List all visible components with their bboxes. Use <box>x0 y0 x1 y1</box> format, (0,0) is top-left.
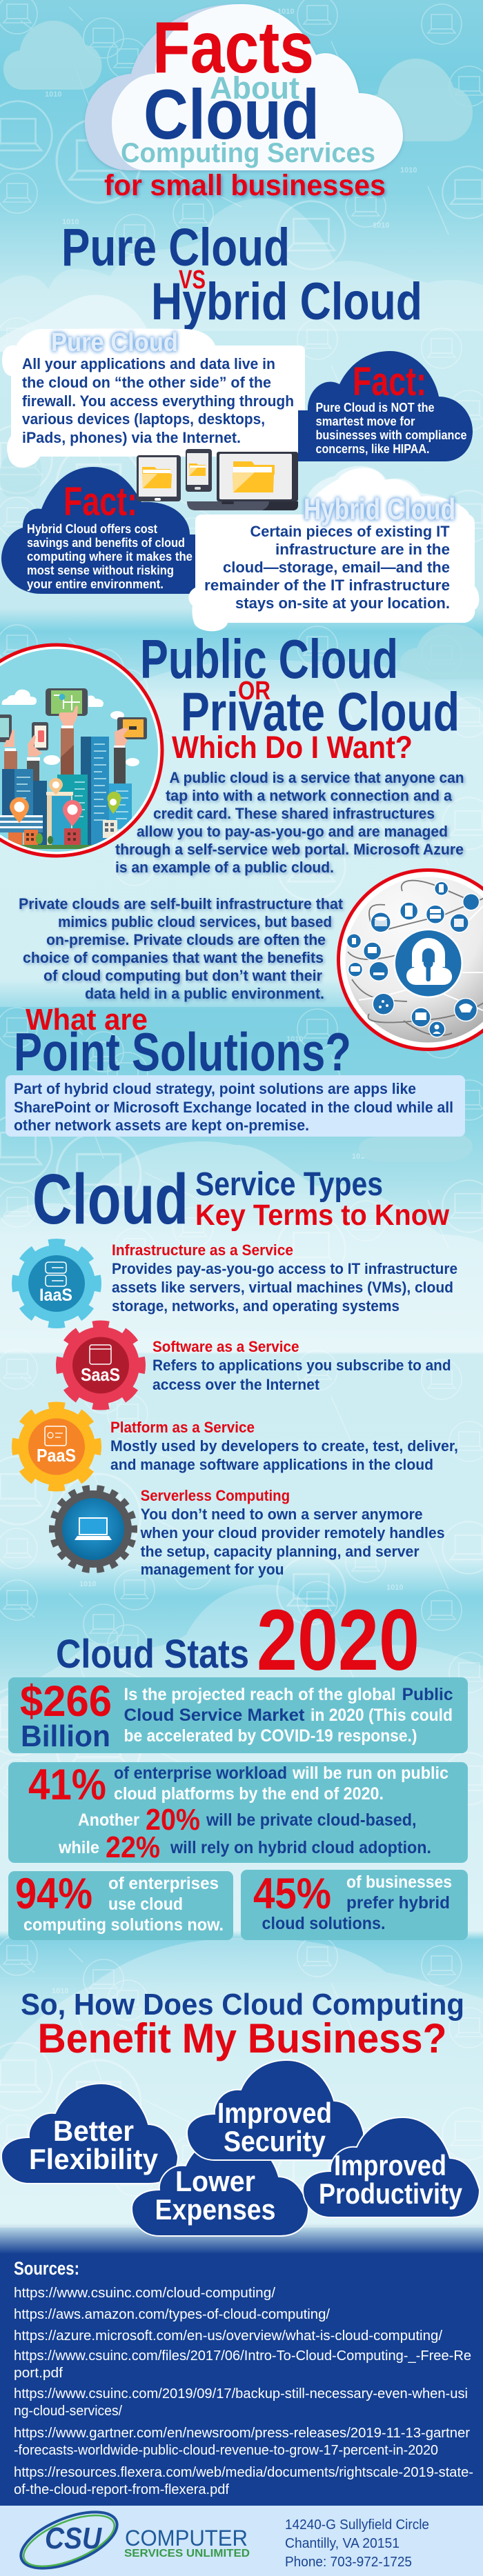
panel: enterprise workload stat: will be run on public <box>292 1764 448 1783</box>
term: infrastructure as a service: assets like servers, virtual machines (VMs), cloud <box>112 1279 453 1296</box>
fact text: smartest move for <box>316 415 415 428</box>
hero cloud front layer <box>112 4 403 170</box>
hybrid cloud body text: cloud—storage, email—and the <box>223 559 450 576</box>
fact text: most sense without risking <box>27 563 174 577</box>
heading: Public Cloud or Private Cloud <box>140 628 460 765</box>
pure cloud body text: firewall. You access everything through <box>22 392 294 410</box>
cloud shape <box>1 467 200 594</box>
hybrid cloud body text: infrastructure are in the <box>275 541 450 558</box>
heading: Cloud Stats 2020 <box>56 1592 420 1688</box>
heading: Cloud Stats 2020: 2020 <box>257 1592 420 1688</box>
sources list: https://resources.flexera.com/web/media/documents/rightscale-2019-state- <box>14 2465 473 2480</box>
laptop <box>187 452 298 510</box>
fact text <box>27 522 193 591</box>
public cloud text: credit card. These shared infrastructures <box>153 805 435 822</box>
public cloud text: is an example of a public cloud. <box>115 859 334 876</box>
heading: Cloud Stats 2020: Cloud Stats <box>56 1632 249 1677</box>
background clouds: pale domes <box>0 199 483 2228</box>
heading: how does cloud computing benefit my business: Benefit My Business? <box>37 2015 447 2061</box>
text: 1010 <box>52 1987 68 1995</box>
hybrid cloud body text: remainder of the IT infrastructure <box>204 577 450 594</box>
sources list: https://www.csuinc.com/2019/09/17/backup-still-necessary-even-when-usi <box>14 2386 468 2402</box>
sources list: of-the-cloud-report-from-flexera.pdf <box>14 2482 229 2497</box>
sources list: https://azure.microsoft.com/en-us/overview/what-is-cloud-computing/ <box>14 2328 442 2344</box>
heading: Public Cloud or Private Cloud: OR <box>238 677 270 706</box>
text: 1010 <box>79 1580 96 1588</box>
text: 1010 <box>62 218 79 226</box>
logo: CSU Computer Services Unlimited: CSU <box>45 2522 102 2555</box>
heading: Pure Cloud vs Hybrid Cloud: Pure Cloud <box>61 218 290 277</box>
term: serverless computing: management for you <box>141 1561 284 1578</box>
text: 1010 <box>286 1035 303 1044</box>
pure cloud body text: the cloud on “the other side” of the <box>22 374 271 391</box>
fact text: Hybrid Cloud offers cost <box>27 522 157 536</box>
panel: 45% stat <box>241 1870 468 1940</box>
public cloud text <box>115 769 464 876</box>
benefit cloud: better flexibility <box>1 2084 178 2184</box>
main title <box>104 7 386 202</box>
stat description: in 2020 (This could <box>310 1706 453 1725</box>
term: serverless computing: the setup, capacity planning, and server <box>141 1543 420 1560</box>
fact cloud: pure cloud <box>298 351 473 461</box>
icon: city with raised hands in circle <box>0 645 166 859</box>
sources list <box>14 2258 473 2497</box>
pale cloud behind pure cloud panel <box>0 295 215 352</box>
fact text: computing where it makes the <box>27 550 193 563</box>
icon: IaaS gear <box>8 1235 106 1332</box>
term: software as a service <box>152 1338 451 1393</box>
fact text: concerns, like HIPAA. <box>316 442 429 456</box>
panel: enterprise workload stat: cloud platforms by the end of 2020. <box>114 1784 384 1804</box>
term: infrastructure as a service: Provides pay-as-you-go access to IT infrastructure <box>112 1260 457 1277</box>
fact cloud: hybrid cloud <box>1 467 200 594</box>
text: 1010 <box>373 221 389 230</box>
sources list: https://www.csuinc.com/cloud-computing/ <box>14 2286 275 2301</box>
address: 14240-G Sullyfield Circle <box>285 2517 429 2533</box>
pure cloud body text: All your applications and data live in <box>22 355 275 372</box>
point solutions text: other network assets are kept on-premise. <box>14 1117 309 1134</box>
stat description: be accelerated by COVID-19 response.) <box>124 1726 417 1746</box>
panel: enterprise workload stat: Another <box>78 1810 139 1830</box>
fact label: Fact: <box>353 359 426 404</box>
private cloud text <box>19 895 344 1002</box>
panel shape <box>2 329 305 468</box>
main title: Cloud <box>144 75 319 154</box>
pure cloud body text: iPads, phones) via the Internet. <box>22 429 241 446</box>
term: serverless computing <box>140 1487 445 1578</box>
sources list: ng-cloud-services/ <box>14 2404 122 2419</box>
benefit cloud: lower expenses: Expenses <box>155 2193 276 2226</box>
cloud shape <box>298 351 473 461</box>
icon: serverless gear <box>49 1485 137 1573</box>
icon: IaaS gear: IaaS <box>39 1286 72 1305</box>
panel: 45% stat: of businesses <box>346 1873 452 1892</box>
footer <box>0 2501 483 2576</box>
heading: Pure Cloud vs Hybrid Cloud: Hybrid Cloud <box>151 272 422 331</box>
private cloud text: Private clouds are self-built infrastructure that <box>19 895 344 912</box>
term: platform as a service: Platform as a Service <box>110 1419 255 1436</box>
stat description: Public <box>402 1685 453 1704</box>
logo: CSU Computer Services Unlimited: COMPUTER <box>125 2526 248 2550</box>
icon: PaaS gear <box>8 1398 106 1495</box>
benefit cloud: lower expenses <box>132 2136 308 2236</box>
sources list: port.pdf <box>14 2366 63 2381</box>
text: 1010 <box>277 8 294 16</box>
phone <box>186 449 212 492</box>
icon: network globe with padlock in circle <box>338 870 483 1050</box>
private cloud text: choice of companies that want the benefits <box>23 949 324 966</box>
term: software as a service: Refers to applications you subscribe to and <box>152 1357 451 1374</box>
fact text: Pure Cloud is NOT the <box>316 401 435 415</box>
term: infrastructure as a service <box>112 1241 457 1315</box>
public cloud text: allow you to pay-as-you-go and are managed <box>137 823 448 840</box>
panel: enterprise workload stat: of enterprise workload <box>114 1764 287 1783</box>
heading: how does cloud computing benefit my business <box>21 1988 464 2061</box>
stat description: Is the projected reach of the global <box>124 1685 396 1704</box>
sources list: Sources: <box>14 2258 79 2279</box>
panel: enterprise workload stat: will rely on hybrid cloud adoption. <box>170 1838 431 1857</box>
public cloud text: A public cloud is a service that anyone can <box>170 769 464 786</box>
icon: PaaS gear: PaaS <box>37 1445 76 1466</box>
stat unit: Billion <box>21 1719 110 1753</box>
icon: tablet, phone and laptop with folders <box>137 449 298 510</box>
public cloud text: tap into with a network connection and a <box>166 787 453 804</box>
benefit cloud: improved productivity: Improved <box>334 2149 446 2181</box>
heading: What are Point Solutions? <box>14 1003 351 1082</box>
background clouds: teal blobs <box>0 21 483 1162</box>
pale cloud behind hybrid panel <box>304 466 469 524</box>
term: software as a service: Software as a Service <box>152 1338 299 1355</box>
heading: Cloud Service Types, Key Terms to Know: Service Types <box>195 1166 383 1203</box>
heading: Cloud Service Types, Key Terms to Know: Cloud <box>32 1159 188 1239</box>
pure cloud heading: Pure Cloud <box>51 328 178 357</box>
panel: 45% stat: prefer hybrid <box>346 1893 450 1913</box>
sources list: https://www.gartner.com/en/newsroom/press-releases/2019-11-13-gartner <box>14 2426 470 2441</box>
main title: Facts <box>152 7 314 88</box>
point solutions text: SharePoint or Microsoft Exchange located in the cloud while all <box>14 1099 453 1116</box>
pure cloud body text <box>22 355 294 446</box>
main title: Computing Services <box>121 138 375 168</box>
heading: What are Point Solutions?: Point Solutions? <box>14 1021 351 1082</box>
main title: About <box>210 70 299 106</box>
stat description: Cloud Service Market <box>124 1706 305 1725</box>
benefit cloud: better flexibility: Flexibility <box>29 2143 159 2175</box>
heading: how does cloud computing benefit my business: So, How Does Cloud Computing <box>21 1988 464 2021</box>
hero cloud back layer <box>85 4 316 170</box>
panel: 94% stat: use cloud <box>108 1895 183 1914</box>
term: platform as a service <box>110 1419 458 1473</box>
private cloud text: of cloud computing but don’t want their <box>43 967 322 984</box>
address: Phone: 703-972-1725 <box>285 2555 412 2570</box>
hybrid cloud body text: stays on-site at your location. <box>235 595 450 612</box>
panel: $266 billion stat <box>8 1677 468 1753</box>
stat number: $266 <box>20 1677 112 1726</box>
term: infrastructure as a service: storage, networks, and operating systems <box>112 1297 400 1315</box>
heading: Public Cloud or Private Cloud: Public Cloud <box>140 628 398 690</box>
benefit cloud: improved security <box>187 2060 364 2160</box>
term: serverless computing: when your cloud provider remotely handles <box>140 1524 445 1541</box>
term: infrastructure as a service: Infrastructure as a Service <box>112 1241 293 1259</box>
panel: pure cloud <box>2 328 305 468</box>
fact text: businesses with compliance <box>316 428 466 442</box>
fact label: Fact: <box>63 479 137 524</box>
logo: CSU Computer Services Unlimited <box>13 2501 250 2576</box>
text: 1010 <box>386 1584 403 1592</box>
panel: 94% stat <box>8 1870 233 1940</box>
sources list: https://aws.amazon.com/types-of-cloud-computing/ <box>14 2307 330 2322</box>
panel: point solutions <box>6 1075 465 1137</box>
panel: 45% stat: cloud solutions. <box>262 1914 385 1933</box>
heading: What are Point Solutions?: What are <box>26 1003 148 1037</box>
benefit cloud: better flexibility: Better <box>53 2115 134 2147</box>
panel: hybrid cloud <box>188 468 479 631</box>
heading: Pure Cloud vs Hybrid Cloud <box>61 218 422 331</box>
logo: CSU Computer Services Unlimited: SERVICES UNLIMITED <box>124 2548 250 2559</box>
panel: enterprise workload stat: while <box>58 1838 99 1857</box>
panel: 94% stat: of enterprises <box>108 1874 219 1893</box>
panel: enterprise workload stat: will be private cloud-based, <box>206 1810 417 1830</box>
term: software as a service: access over the Internet <box>152 1376 320 1393</box>
private cloud text: mimics public cloud services, but based <box>58 913 332 930</box>
panel: enterprise workload stat <box>8 1761 468 1864</box>
tablet <box>137 455 181 501</box>
benefit cloud: improved security: Improved <box>217 2097 332 2129</box>
address: Chantilly, VA 20151 <box>285 2536 400 2551</box>
text: 1010 <box>400 166 417 174</box>
panel: 45% stat: 45% <box>253 1870 331 1918</box>
fact text <box>316 401 466 456</box>
public cloud text: through a self-service web portal. Microsoft Azure <box>115 841 464 858</box>
term: platform as a service: Mostly used by developers to create, test, deliver, <box>110 1437 458 1455</box>
fact text: savings and benefits of cloud <box>27 536 185 550</box>
panel: enterprise workload stat: 20% <box>146 1803 200 1837</box>
point solutions text: Part of hybrid cloud strategy, point solutions are apps like <box>14 1080 416 1097</box>
panel shape <box>188 468 479 631</box>
sources list: -forecasts-worldwide-public-cloud-revenue-to-grow-17-percent-in-2020 <box>14 2443 438 2458</box>
benefit cloud: improved productivity <box>303 2117 480 2217</box>
heading: Pure Cloud vs Hybrid Cloud: VS <box>179 266 206 294</box>
sources list: https://www.csuinc.com/files/2017/06/Intro-To-Cloud-Computing-_-Free-Re <box>14 2348 471 2364</box>
heading: Cloud Service Types, Key Terms to Know <box>32 1159 450 1239</box>
main title: for small businesses <box>104 169 386 202</box>
pure cloud body text: various devices (laptops, desktops, <box>22 410 265 428</box>
hybrid cloud body text <box>204 523 450 612</box>
point solutions text <box>14 1080 453 1134</box>
private cloud text: data held in a public environment. <box>85 985 324 1002</box>
term: serverless computing: You don’t need to own a server anymore <box>141 1506 423 1523</box>
icon: SaaS gear: SaaS <box>81 1364 120 1385</box>
heading: Public Cloud or Private Cloud: Which Do I Want? <box>172 730 413 765</box>
address <box>285 2517 429 2570</box>
benefit cloud: lower expenses: Lower <box>175 2165 255 2197</box>
text: 1010 <box>45 90 61 99</box>
panel: 94% stat: 94% <box>15 1870 92 1918</box>
private cloud text: on-premise. Private clouds are often the <box>46 931 326 948</box>
hero cloud <box>85 4 403 170</box>
text: 1010 <box>352 1152 368 1161</box>
panel: enterprise workload stat: 41% <box>28 1761 106 1809</box>
fact text: your entire environment. <box>27 577 164 591</box>
term: platform as a service: and manage software applications in the cloud <box>110 1456 433 1473</box>
term: serverless computing: Serverless Computing <box>141 1487 290 1504</box>
benefit cloud: improved security: Security <box>224 2125 326 2157</box>
hybrid cloud body text: Certain pieces of existing IT <box>250 523 450 540</box>
panel: enterprise workload stat: 22% <box>106 1830 160 1864</box>
stat description <box>124 1685 453 1746</box>
benefit cloud: improved productivity: Productivity <box>319 2177 463 2210</box>
icon: SaaS gear <box>52 1317 150 1414</box>
panel: 94% stat: computing solutions now. <box>23 1915 224 1935</box>
heading: Cloud Service Types, Key Terms to Know: Key Terms to Know <box>195 1199 450 1232</box>
